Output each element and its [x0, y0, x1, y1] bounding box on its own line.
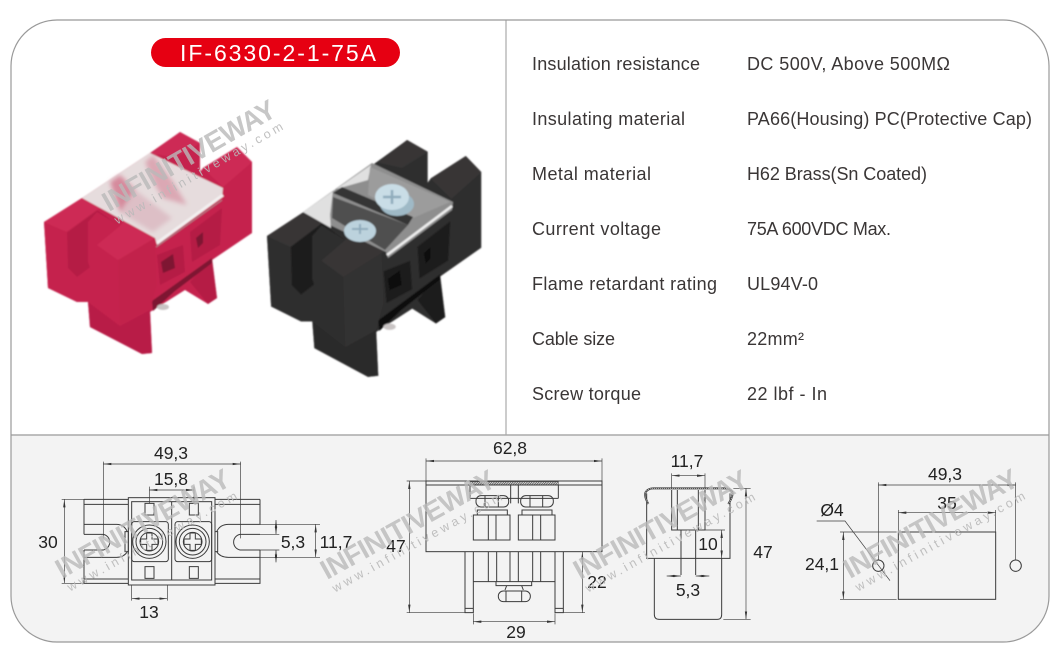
clear cap: [82, 153, 223, 247]
labels: side view dimensions: 47: [753, 542, 773, 562]
row: metal material: [532, 164, 927, 184]
watermark 4: www.infinitiveway.com: [852, 489, 1028, 595]
row: metal material: Metal material: [532, 164, 651, 184]
labels: front view dimensions: 47: [386, 536, 406, 556]
labels: top view dimensions: 5,3: [281, 532, 305, 552]
labels: side view dimensions: [671, 451, 773, 600]
row: flame retardant rating: UL94V-0: [747, 274, 818, 294]
row: flame retardant rating: Flame retardant rating: [532, 274, 717, 294]
watermark 2: INFINITIVEWAY: [315, 464, 500, 585]
row: screw torque: [532, 384, 827, 404]
row: current voltage: Current voltage: [532, 219, 661, 239]
row: metal material: H62 Brass(Sn Coated): [747, 164, 927, 184]
labels: side view dimensions: 5,3: [676, 580, 700, 600]
labels: footprint dimensions: 24,1: [805, 554, 839, 574]
drawing: side view: [645, 451, 773, 619]
watermark 1: INFINITIVEWAY: [50, 463, 235, 584]
labels: front view dimensions: 22: [587, 572, 607, 592]
row: current voltage: 75A 600VDC Max.: [747, 219, 891, 239]
labels: front view dimensions: [386, 438, 607, 642]
row: insulating material: Insulating material: [532, 109, 685, 129]
labels: front view dimensions: 29: [506, 622, 526, 642]
drawing: front view: [386, 438, 607, 642]
watermark 2: www.infinitiveway.com: [329, 490, 505, 596]
row: screw torque: 22 lbf - In: [747, 384, 827, 404]
labels: front view dimensions: 62,8: [493, 438, 527, 458]
row: insulation resistance: Insulation resistance: [532, 54, 700, 74]
labels: footprint dimensions: 49,3: [928, 464, 962, 484]
drawing: mounting footprint: [805, 464, 1021, 599]
labels: footprint dimensions: 35: [937, 493, 957, 513]
watermark on photo: www.infinitiveway.com: [111, 120, 285, 228]
labels: top view dimensions: 11,7: [320, 532, 352, 552]
drawing: top view: [38, 443, 352, 622]
labels: footprint dimensions: [805, 464, 962, 574]
labels: top view dimensions: 13: [139, 602, 159, 622]
product photo: red terminal block: [44, 132, 252, 354]
labels: top view dimensions: 30: [38, 532, 58, 552]
row: insulating material: PA66(Housing) PC(Protective Cap): [747, 109, 1032, 129]
labels: footprint dimensions: Ø4: [820, 500, 844, 520]
row: insulation resistance: [532, 54, 950, 74]
labels: top view dimensions: 49,3: [154, 443, 188, 463]
watermark 4: INFINITIVEWAY: [838, 463, 1023, 584]
row: insulating material: [532, 109, 1032, 129]
row: cable size: [532, 329, 804, 349]
product photo: black terminal block: [267, 140, 481, 377]
row: insulation resistance: DC 500V, Above 500MΩ: [747, 54, 950, 74]
labels: top view dimensions: [38, 443, 352, 622]
labels: side view dimensions: 10: [698, 534, 718, 554]
row: cable size: 22mm²: [747, 329, 804, 349]
labels: side view dimensions: 11,7: [671, 451, 703, 471]
row: current voltage: [532, 219, 891, 239]
watermark 3: www.infinitiveway.com: [582, 490, 758, 596]
clear cap with screws: [303, 163, 453, 258]
row: screw torque: Screw torque: [532, 384, 641, 404]
labels: top view dimensions: 15,8: [154, 469, 188, 489]
watermark 1: www.infinitiveway.com: [64, 489, 240, 595]
row: flame retardant rating: [532, 274, 818, 294]
watermark 3: INFINITIVEWAY: [568, 464, 753, 585]
title: IF-6330-2-1-75A: [180, 40, 377, 66]
panel: dimensions background: [11, 435, 1049, 642]
specification table: [532, 54, 1032, 404]
watermark on photo: INFINITIVEWAY: [97, 93, 281, 217]
row: cable size: Cable size: [532, 329, 615, 349]
